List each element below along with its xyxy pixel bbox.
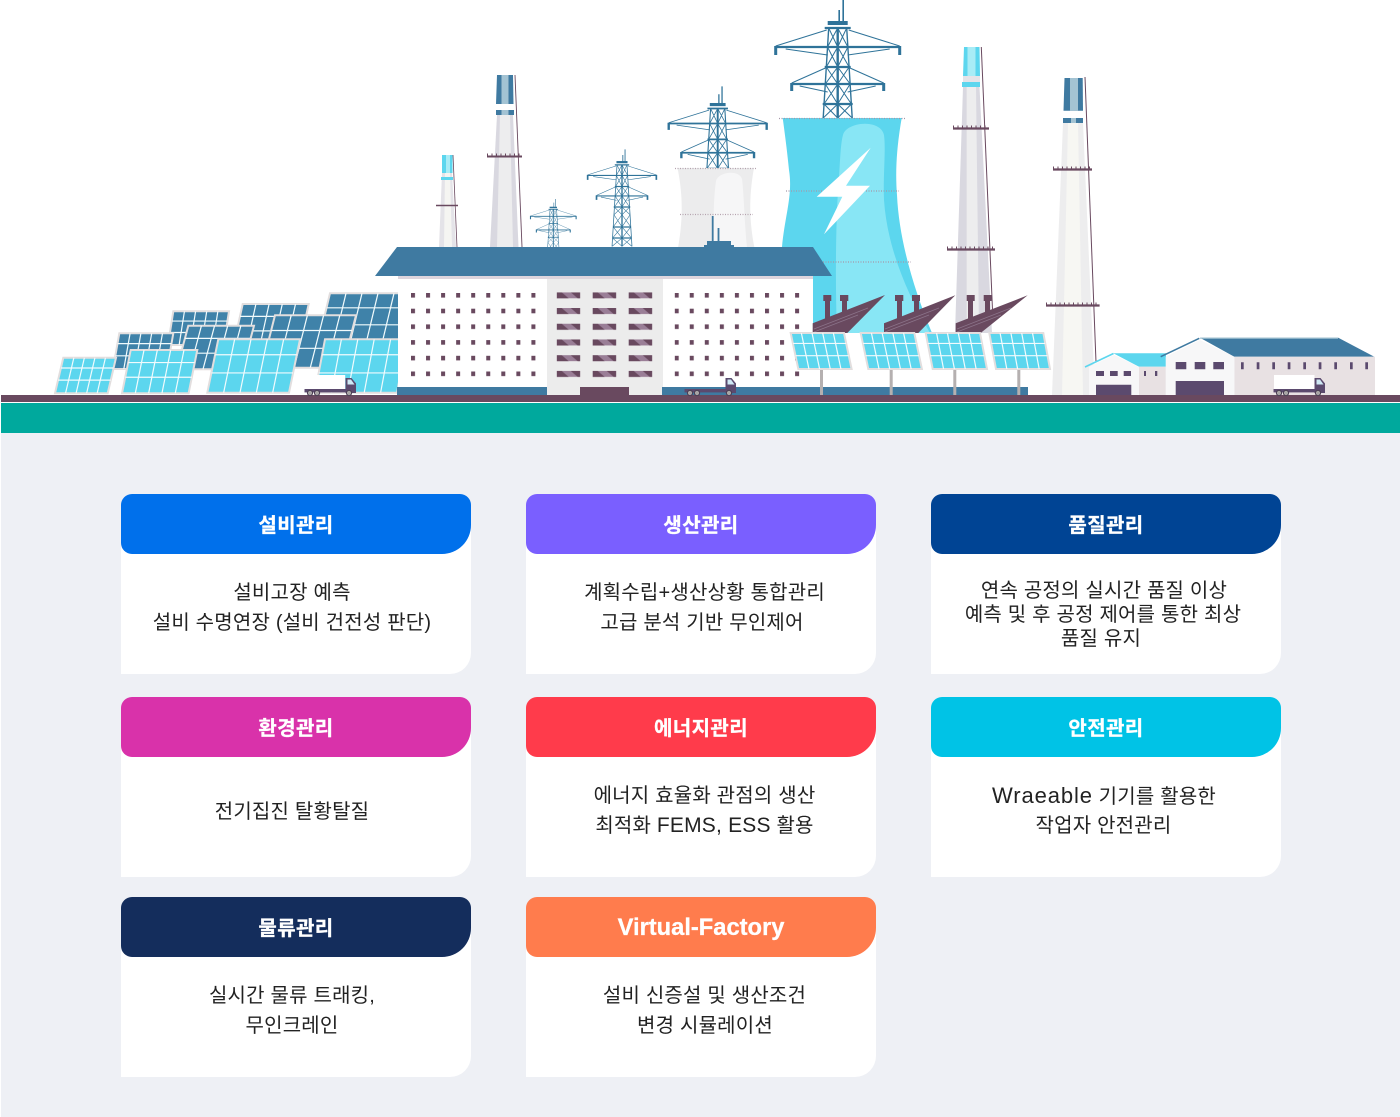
text: 환경관리 설명: 전기집진 탈황탈질 [215, 801, 369, 823]
panel: 설비관리 [121, 494, 471, 674]
panel background [1, 433, 1400, 1117]
heading: Virtual-Factory: Virtual-Factory [618, 915, 784, 941]
text: 생산관리 설명: 계획수립+생산상황 통합관리 [584, 582, 825, 604]
heading: 물류관리 [121, 897, 471, 957]
truck 2 [684, 378, 736, 396]
text: 설비관리 설명: 설비고장 예측 [233, 582, 351, 604]
chimney: tall cyan right [947, 47, 995, 333]
illustration: industrial complex [1, 0, 1400, 433]
transmission tower 2 [588, 149, 656, 246]
heading: 생산관리 [526, 494, 876, 554]
text: Virtual-Factory 설명: 변경 시뮬레이션 [637, 1015, 773, 1037]
heading: 품질관리: 품질관리 [1068, 515, 1144, 537]
panel: 환경관리 [121, 697, 471, 877]
text: 물류관리 설명: 무인크레인 [246, 1015, 338, 1037]
heading: 물류관리: 물류관리 [258, 918, 334, 940]
factory roof [375, 247, 832, 276]
heading: 안전관리 [931, 697, 1281, 757]
solar panel array: left field [55, 293, 410, 393]
panel: 물류관리 [121, 897, 471, 1077]
transmission tower 4 [776, 0, 900, 175]
transmission tower 3 [669, 86, 767, 225]
solar panels on poles [791, 333, 1050, 395]
text: Virtual-Factory 설명 [603, 985, 806, 1037]
text: 품질관리 설명: 예측 및 후 공정 제어를 통한 최상 [965, 604, 1241, 626]
text: 에너지관리 설명: 에너지 효율화 관점의 생산 [594, 785, 815, 807]
text: Virtual-Factory 설명: 설비 신증설 및 생산조건 [603, 985, 806, 1007]
heading: 생산관리: 생산관리 [663, 515, 739, 537]
truck 3 [1274, 375, 1325, 396]
transmission tower 1 [530, 199, 576, 263]
panel: 에너지관리 [526, 697, 876, 877]
text: 안전관리 설명: 작업자 안전관리 [1036, 815, 1171, 837]
text: 물류관리 설명: 실시간 물류 트래킹, [209, 985, 375, 1007]
heading: 환경관리: 환경관리 [258, 718, 334, 740]
chimney: small cyan [436, 155, 458, 247]
text: 품질관리 설명: 연속 공정의 실시간 품질 이상 [981, 580, 1227, 602]
ground road [1, 395, 1400, 402]
heading: 설비관리: 설비관리 [258, 515, 334, 537]
cooling tower: white [675, 168, 757, 248]
panel: 안전관리 [931, 697, 1281, 877]
icon: lightning bolt [817, 148, 871, 234]
text: 에너지관리 설명: 최적화 FEMS, ESS 활용 [595, 814, 814, 837]
heading: 환경관리 [121, 697, 471, 757]
warehouse: large blue roof [1161, 338, 1375, 395]
text: 품질관리 설명 [965, 580, 1241, 650]
factory building [375, 247, 1028, 395]
cooling tower: cyan with lightning bolt [779, 118, 932, 333]
text: 설비관리 설명: 설비 수명연장 (설비 건전성 판단) [153, 612, 431, 634]
panel: 생산관리 [526, 494, 876, 674]
text: 안전관리 설명: Wraeable 기기를 활용한 [992, 783, 1216, 808]
text: 물류관리 설명 [209, 985, 375, 1037]
text: 생산관리 설명: 고급 분석 기반 무인제어 [600, 612, 804, 634]
text: 에너지관리 설명 [594, 785, 815, 837]
text: 안전관리 설명 [992, 783, 1216, 837]
heading: 설비관리 [121, 494, 471, 554]
heading: 에너지관리: 에너지관리 [654, 718, 748, 740]
text: 설비관리 설명 [153, 582, 431, 634]
text: 품질관리 설명: 품질 유지 [1061, 628, 1141, 650]
chimney: tall blue right [1046, 77, 1100, 395]
heading: 안전관리: 안전관리 [1068, 718, 1144, 740]
chimney: tall blue [487, 75, 522, 247]
truck 1 [304, 375, 356, 396]
text: 생산관리 설명 [584, 582, 825, 634]
heading: Virtual-Factory [526, 897, 876, 957]
sawtooth roof units with stacks [813, 295, 1028, 334]
heading: 품질관리 [931, 494, 1281, 554]
panel: Virtual-Factory [526, 897, 876, 1077]
panel: 품질관리 [931, 494, 1281, 674]
ground strip [1, 403, 1400, 433]
heading: 에너지관리 [526, 697, 876, 757]
warehouse: small cyan roof [1085, 353, 1166, 395]
